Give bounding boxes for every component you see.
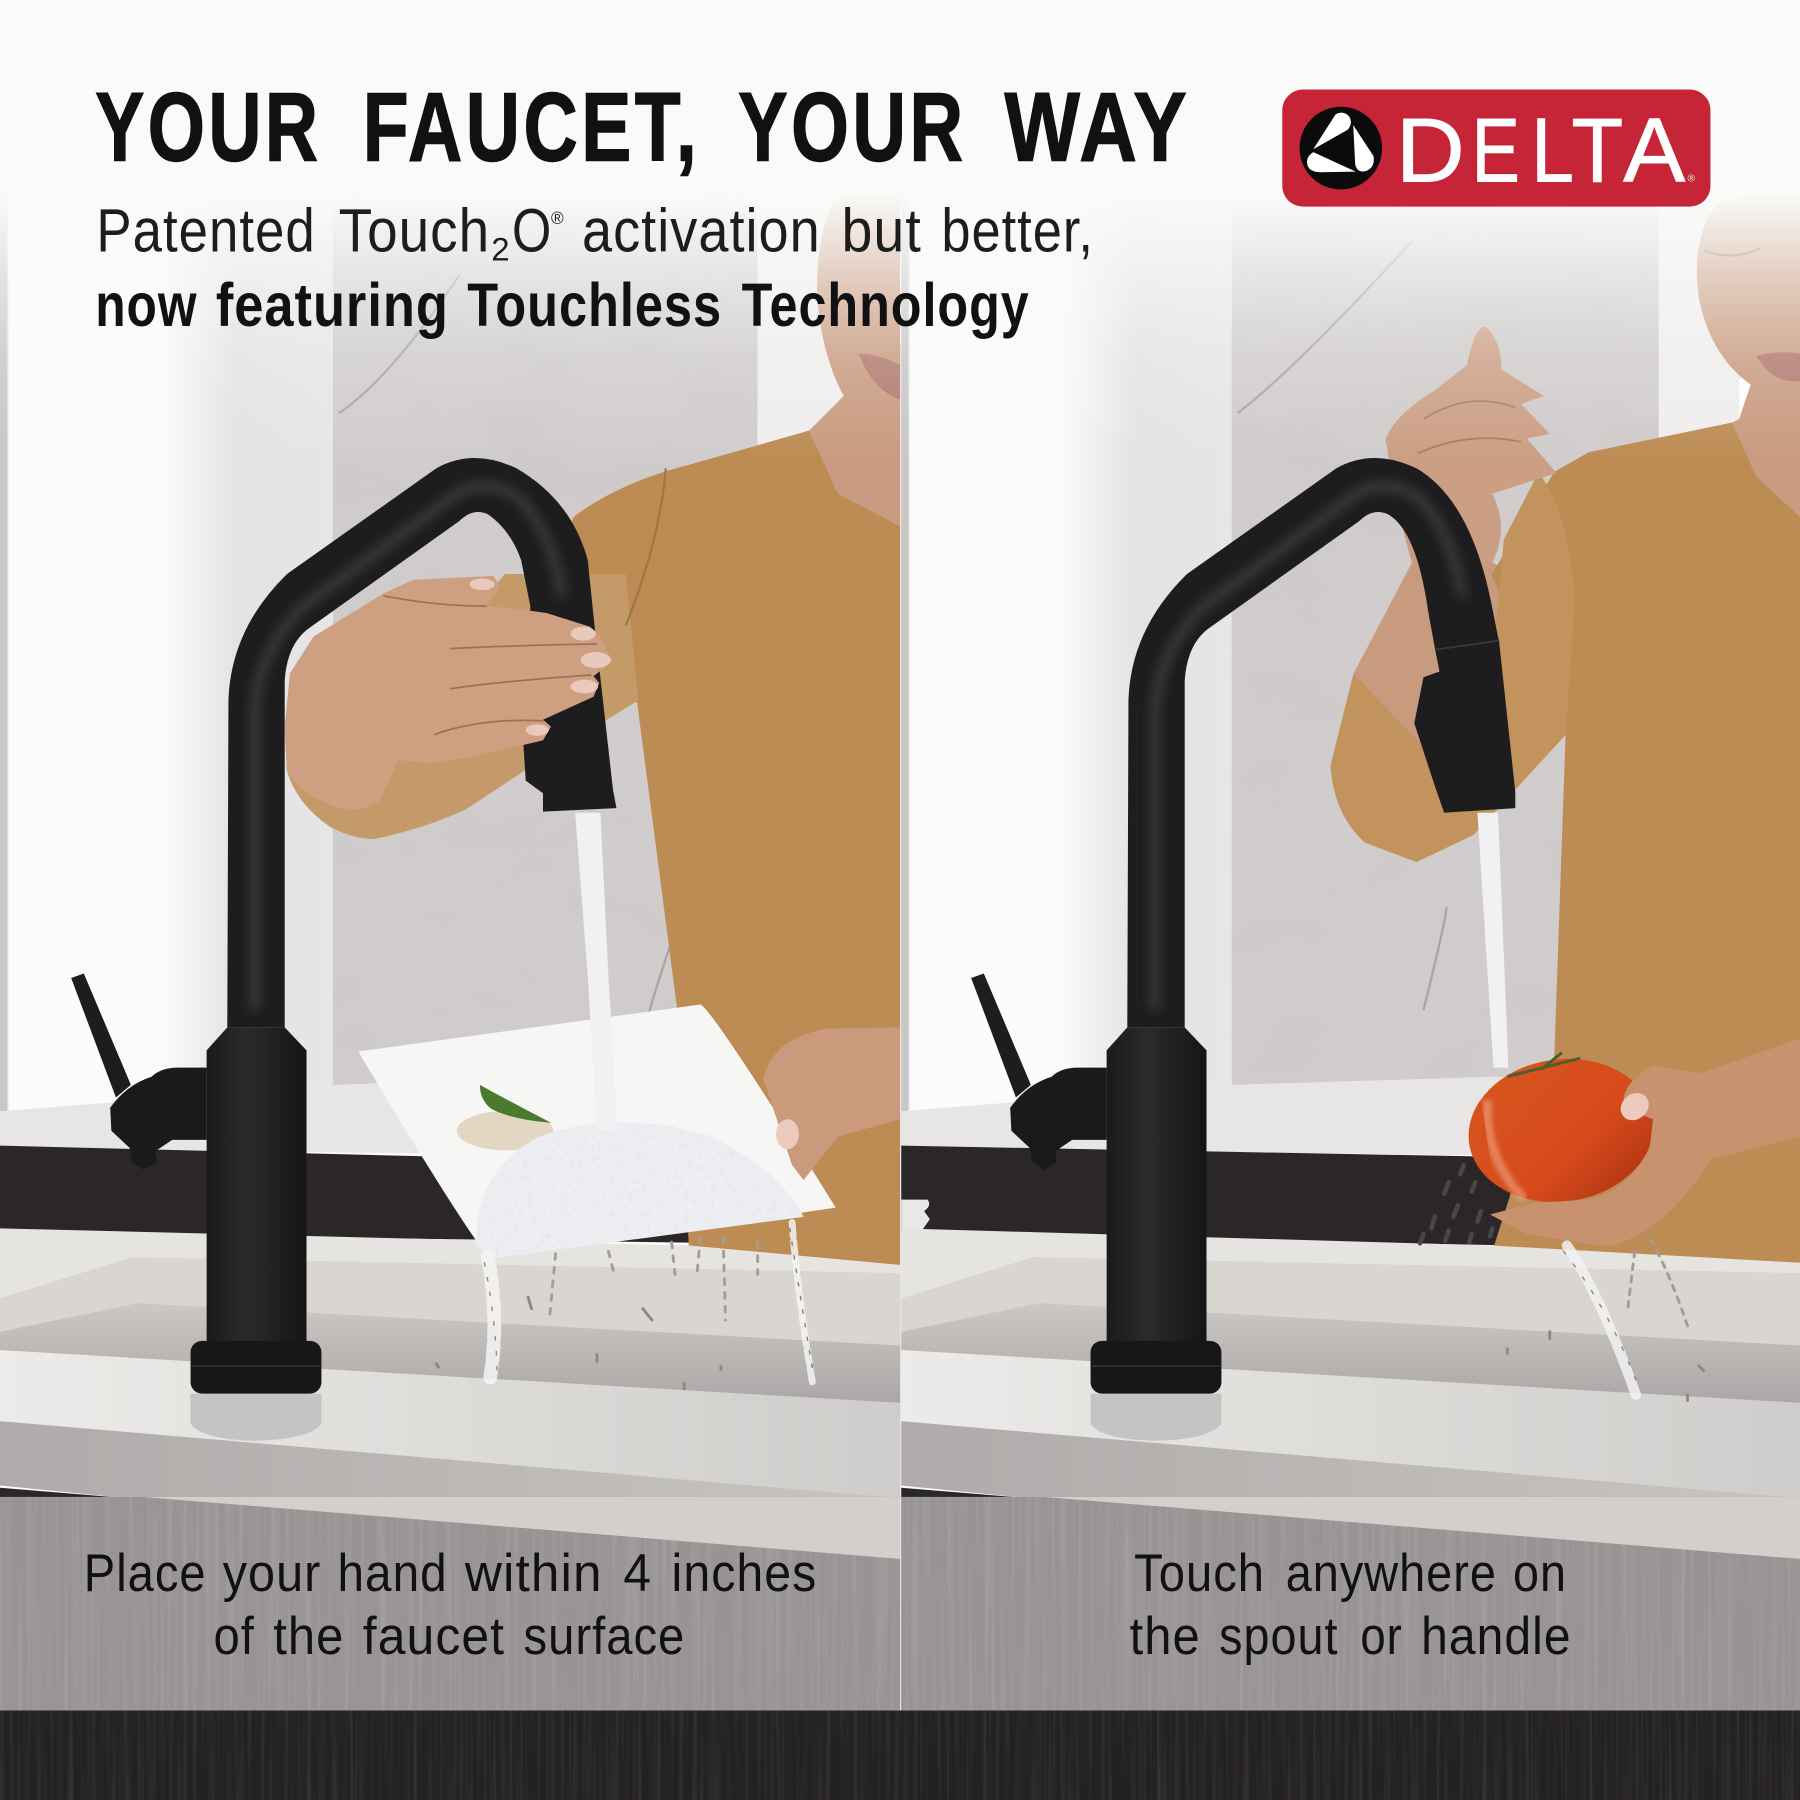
upper hand	[1386, 327, 1557, 562]
sweater	[1491, 422, 1800, 1263]
handle lever	[71, 973, 131, 1097]
subtitle line 1: O	[512, 196, 552, 264]
spout sheen	[255, 486, 563, 1010]
lips	[859, 354, 900, 399]
dark splash	[1420, 1165, 1492, 1243]
faucet foot	[1091, 1341, 1221, 1394]
caption right: on	[1513, 1544, 1567, 1603]
logo wordmark	[1396, 100, 1686, 201]
caption left: of	[214, 1607, 255, 1666]
subtitle line 1: Patented	[96, 196, 316, 264]
subtitle line 1: but	[841, 196, 922, 264]
caption right: spout	[1219, 1607, 1339, 1666]
plate	[358, 1004, 836, 1258]
caption right: Touch	[1134, 1544, 1265, 1603]
pool texture	[520, 1152, 802, 1242]
handle lever	[971, 973, 1031, 1097]
foot seam	[1092, 1365, 1220, 1367]
face	[1697, 189, 1800, 517]
subtitle line 1: ®	[551, 208, 564, 228]
dishes	[901, 1200, 930, 1238]
herb leaf	[480, 1085, 551, 1123]
caption right: or	[1360, 1607, 1403, 1666]
faucet reflection	[1091, 1394, 1221, 1441]
cabinet	[0, 1146, 689, 1243]
ledge	[901, 1077, 1800, 1159]
caption left: your	[223, 1544, 321, 1603]
subtitle line 1: 2	[491, 232, 511, 268]
caption left: surface	[523, 1607, 685, 1666]
caption left: the	[273, 1607, 344, 1666]
cabinet	[901, 1146, 1515, 1246]
logo: Delta	[1282, 90, 1710, 207]
panel divider	[900, 344, 901, 1710]
subtitle line 2: Technology	[742, 271, 1030, 339]
title: YOUR	[95, 73, 321, 182]
food stains	[457, 1111, 553, 1150]
marble panel	[332, 224, 758, 1085]
water stream	[575, 813, 618, 1131]
sink rim	[0, 1257, 900, 1345]
top fade	[0, 0, 1800, 459]
foot seam	[192, 1365, 320, 1367]
lower hand	[1490, 1039, 1800, 1247]
logo badge	[1282, 90, 1710, 207]
front hand	[285, 576, 613, 810]
spout sheen	[1155, 486, 1462, 1010]
logo wordmark: T	[1572, 100, 1623, 201]
logo wordmark: A	[1623, 100, 1686, 201]
subtitle line 2: Touchless	[467, 271, 722, 339]
tomato	[1458, 1041, 1663, 1214]
pooled water	[476, 1122, 804, 1258]
caption right: the	[1130, 1607, 1201, 1666]
thumb nail	[776, 1119, 799, 1149]
spray seam	[1435, 641, 1499, 650]
finger lines	[383, 596, 597, 735]
sweater	[540, 430, 900, 1265]
handle hub	[1010, 1068, 1107, 1170]
face	[809, 189, 900, 526]
sink rim	[901, 1257, 1800, 1345]
caption band right	[901, 1497, 1800, 1710]
plate hand	[763, 1027, 900, 1180]
thumb nail	[1615, 1087, 1654, 1126]
drips	[436, 1223, 814, 1389]
counter top	[0, 1350, 900, 1499]
logo mark	[1307, 113, 1374, 172]
lips	[1756, 352, 1800, 381]
faucet foot	[191, 1341, 321, 1394]
right wall	[758, 324, 844, 445]
caption left: within	[464, 1544, 603, 1603]
water stream	[1477, 813, 1508, 1068]
caption left: Place	[84, 1544, 207, 1603]
subtitle line 2	[95, 271, 1030, 339]
title	[95, 73, 1190, 182]
sleeve fold	[626, 468, 666, 626]
sweater sleeve	[287, 574, 638, 839]
caption left: faucet	[363, 1607, 505, 1666]
caption right: anywhere	[1286, 1544, 1497, 1603]
upper forearm	[1353, 436, 1515, 827]
faucet spout	[227, 458, 616, 1027]
faucet reflection	[191, 1394, 321, 1441]
logo wordmark: L	[1531, 100, 1574, 201]
runoff water	[1507, 1240, 1704, 1401]
wall	[0, 222, 333, 1112]
handle hub	[110, 1068, 207, 1170]
sweater sleeve	[1330, 473, 1575, 862]
subtitle line 1: Touch	[339, 196, 490, 264]
registered mark: ®	[1688, 173, 1696, 184]
marble panel	[1232, 115, 1659, 1091]
counter front edge	[0, 1421, 900, 1498]
faucet base	[1107, 1027, 1207, 1343]
logo wordmark: E	[1472, 100, 1520, 201]
caption left: hand	[338, 1544, 448, 1603]
eye	[1704, 248, 1761, 255]
subtitle line 1	[96, 196, 1094, 268]
title: WAY	[1004, 73, 1190, 182]
right wall	[1659, 115, 1800, 689]
sink basin	[0, 1303, 900, 1405]
caption right	[1130, 1544, 1572, 1666]
logo wordmark: D	[1396, 100, 1465, 201]
caption left	[84, 1544, 817, 1666]
faucet spout	[1127, 458, 1515, 1027]
caption right: handle	[1421, 1607, 1572, 1666]
wall	[901, 0, 1280, 1148]
dark corner	[901, 1488, 1027, 1498]
counter top	[901, 1350, 1800, 1499]
subtitle line 1: activation	[582, 196, 821, 264]
footer band	[0, 1710, 1800, 1800]
window	[1739, 379, 1762, 425]
faucet base	[207, 1027, 307, 1343]
caption left: 4	[623, 1544, 652, 1603]
panel: right photo	[901, 0, 1800, 1499]
subtitle line 2: featuring	[216, 271, 449, 339]
subtitle line 2: now	[95, 271, 197, 339]
subtitle line 1: better,	[941, 196, 1094, 264]
logo circle	[1299, 107, 1382, 189]
counter back	[901, 1228, 1800, 1299]
sink basin	[901, 1303, 1800, 1405]
finger nails	[470, 579, 611, 736]
caption left: inches	[672, 1544, 817, 1603]
caption band left	[0, 1497, 900, 1710]
counter back	[0, 1228, 900, 1299]
ledge	[0, 1084, 420, 1154]
finger lines	[1418, 401, 1521, 453]
title: YOUR	[738, 73, 967, 182]
title: FAUCET,	[363, 73, 700, 182]
panel: left photo	[0, 205, 900, 1497]
counter front edge	[901, 1421, 1800, 1498]
dark corner	[0, 1488, 112, 1497]
